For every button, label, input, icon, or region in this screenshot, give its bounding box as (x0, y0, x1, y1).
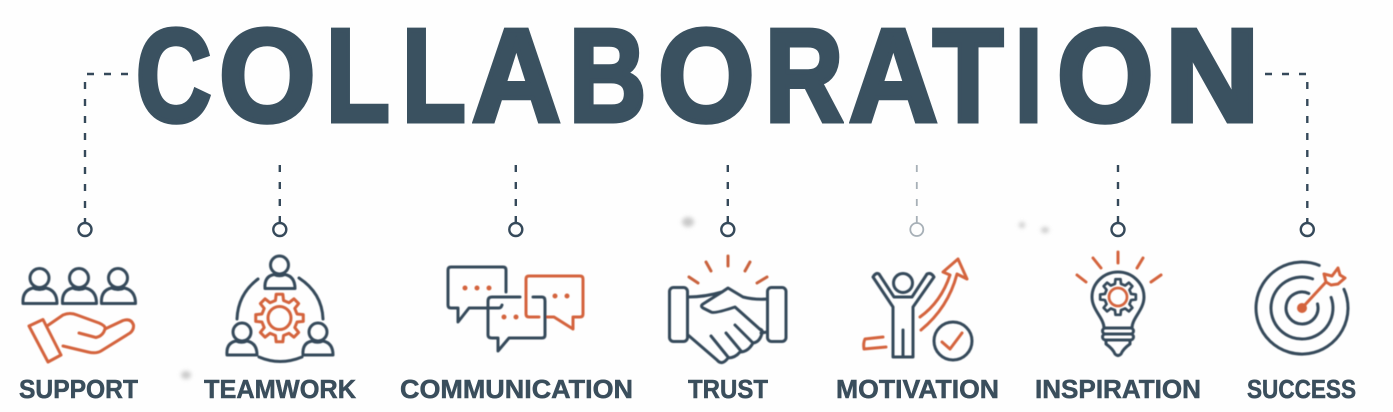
title (136, 2, 1260, 149)
dart (1298, 268, 1345, 312)
icon: inspiration (1077, 252, 1161, 356)
gear (256, 294, 303, 342)
label: teamwork: TEAMWORK (204, 376, 357, 404)
title: B (569, 2, 646, 149)
title: A (849, 2, 938, 149)
title: L (402, 2, 466, 149)
bulb rays (1077, 252, 1161, 282)
bubble middle (488, 297, 545, 351)
title: T (933, 2, 1003, 149)
person (873, 273, 934, 357)
hand (29, 314, 134, 362)
bubble orange (526, 276, 583, 329)
title: O (219, 2, 315, 149)
connector: trust (721, 165, 734, 236)
connector: success (1265, 74, 1314, 236)
connector: support (78, 74, 128, 236)
bubble left (448, 267, 506, 322)
title: C (136, 2, 211, 149)
target rings (1256, 262, 1348, 354)
label: trust: TRUST (688, 376, 768, 404)
people (23, 268, 136, 304)
label: support: SUPPORT (19, 376, 138, 404)
smudges (181, 217, 1049, 379)
icon: teamwork (227, 256, 333, 362)
rays (689, 256, 767, 283)
bulb gear (1100, 279, 1136, 315)
icon: success (1256, 262, 1348, 354)
title: A (472, 2, 561, 149)
label: motivation: MOTIVATION (836, 376, 999, 404)
connector: teamwork (273, 165, 286, 236)
title: O (1057, 2, 1154, 149)
icon: support (23, 268, 136, 362)
bulb (1092, 272, 1144, 356)
connector: inspiration (1112, 165, 1124, 236)
check badge (934, 322, 972, 360)
icon: motivation (864, 259, 972, 360)
label: inspiration: INSPIRATION (1035, 376, 1201, 404)
chat dots (462, 286, 570, 320)
title: L (326, 2, 390, 149)
icon: communication (448, 267, 583, 351)
title: R (765, 2, 843, 149)
label: communication: COMMUNICATION (400, 376, 633, 404)
icon: trust (670, 256, 786, 363)
label: success: SUCCESS (1247, 376, 1356, 404)
title: I (1015, 2, 1042, 149)
title: N (1165, 2, 1260, 149)
connector: motivation (910, 165, 923, 236)
connector: communication (509, 165, 522, 236)
handshake (670, 288, 786, 363)
rising arrow (864, 259, 967, 349)
team members (227, 256, 333, 362)
title: O (658, 2, 755, 149)
